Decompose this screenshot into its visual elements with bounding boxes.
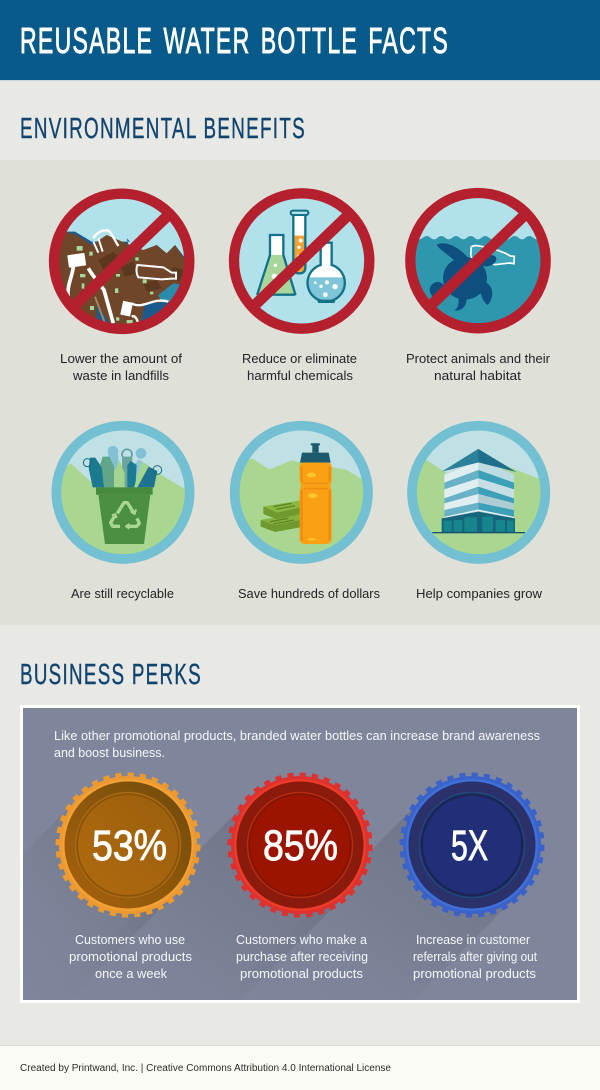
badge: 85% <box>230 774 370 916</box>
caption: landfills: Lower the amount of <box>60 351 182 366</box>
bottles in bin <box>83 446 162 490</box>
office tower <box>432 449 525 533</box>
number: 85% <box>263 822 338 870</box>
caption: 5X: promotional products <box>413 966 536 981</box>
caption: chemicals: harmful chemicals <box>247 368 353 383</box>
caption: save money: Save hundreds of dollars <box>238 586 380 601</box>
caption: 85%: Customers who make a <box>236 932 368 947</box>
header banner <box>0 0 600 81</box>
intro text: and boost business. <box>54 745 165 760</box>
icon: company building <box>412 426 545 560</box>
caption: 85%: purchase after receiving <box>236 949 368 964</box>
caption: 53% <box>69 932 192 981</box>
caption: 5X: referrals after giving out <box>413 949 537 964</box>
caption: companies: Help companies grow <box>416 586 543 601</box>
caption: landfills <box>60 351 182 383</box>
long shadows of badges <box>23 797 520 1000</box>
caption: 85% <box>236 932 368 981</box>
panel: business perks <box>22 706 578 1002</box>
icon: save money <box>233 426 368 560</box>
caption: animals: natural habitat <box>434 368 521 383</box>
footer <box>0 1045 600 1090</box>
caption: chemicals <box>242 351 357 383</box>
number: 53% <box>92 822 167 870</box>
recycling symbol <box>111 503 139 529</box>
footer credit: Created by Printwand, Inc. | Creative Commons Attribution 4.0 International License <box>20 1063 391 1074</box>
plastic bottles in the landfill <box>68 230 176 323</box>
caption: animals <box>406 351 551 383</box>
heading: business perks: BUSINESS PERKS <box>20 659 202 691</box>
caption: 5X <box>413 932 537 981</box>
caption: 53%: once a week <box>95 966 167 981</box>
caption: animals: Protect animals and their <box>406 351 551 366</box>
caption: 85%: promotional products <box>240 966 363 981</box>
icon: no chemicals <box>234 193 369 329</box>
icon: no landfill waste <box>53 194 190 330</box>
badge: 53% <box>58 774 198 916</box>
caption: 53%: promotional products <box>69 949 192 964</box>
caption: chemicals: Reduce or eliminate <box>242 351 357 366</box>
caption: 53%: Customers who use <box>75 932 185 947</box>
badge: 5X <box>402 774 542 916</box>
heading: environmental benefits: ENVIRONMENTAL BENEFITS <box>20 113 306 145</box>
intro text <box>54 728 540 760</box>
intro text: Like other promotional products, branded water bottles can increase brand awareness <box>54 728 540 743</box>
panel: environmental benefits <box>0 160 600 625</box>
orange bottle <box>300 443 332 544</box>
caption: recyclable: Are still recyclable <box>71 586 174 601</box>
icon: no harm to sea animals <box>408 193 555 330</box>
recycling bin <box>96 487 153 544</box>
cash stacks <box>261 501 300 532</box>
icon: recyclable <box>53 426 190 560</box>
caption: landfills: waste in landfills <box>72 368 170 383</box>
caption: 5X: Increase in customer <box>416 932 531 947</box>
number: 5X <box>451 822 488 870</box>
